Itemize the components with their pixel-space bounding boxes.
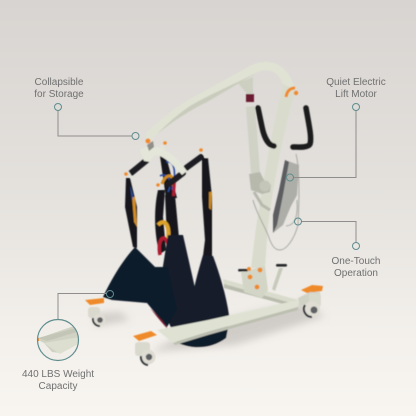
heading: motor: Quiet Electric — [326, 77, 386, 88]
left strap — [125, 178, 137, 248]
rear caster and pedal — [298, 285, 323, 317]
orange clip on mast — [286, 88, 295, 97]
mast base plate — [241, 266, 268, 298]
heading: weight: Capacity — [39, 381, 77, 392]
mast — [251, 84, 295, 268]
lift device — [85, 62, 325, 365]
heading: operation: Operation — [334, 268, 378, 279]
leader line — [294, 110, 356, 178]
callout: weight capacity — [22, 290, 114, 392]
floor shadows — [95, 302, 325, 352]
front base beam — [157, 300, 298, 343]
heading: collapsible: for Storage — [34, 89, 84, 100]
heading: weight: 440 LBS Weight — [22, 369, 94, 380]
handles — [258, 108, 274, 146]
heading: motor: Lift Motor — [335, 89, 378, 100]
control box — [273, 160, 299, 233]
callout: quiet electric lift motor — [286, 77, 386, 181]
callout: collapsible for storage — [34, 77, 139, 140]
rear base frame — [223, 279, 298, 308]
cables — [253, 154, 299, 250]
actuator — [238, 77, 271, 210]
heading: collapsible: Collapsible — [35, 77, 83, 88]
sling seat panels — [103, 235, 230, 347]
boom arm — [146, 62, 295, 143]
right strap — [202, 158, 212, 256]
lower mast rear hardware — [272, 268, 283, 291]
detail circle: beam close-up — [36, 320, 80, 360]
front casters and pedals — [85, 298, 157, 365]
leader line — [58, 294, 106, 320]
callout: one-touch operation — [294, 218, 380, 279]
heading: operation: One-Touch — [332, 256, 380, 267]
leader line — [58, 110, 132, 136]
middle straps — [155, 156, 179, 255]
leader line — [302, 222, 356, 242]
hanger bar — [124, 138, 207, 189]
